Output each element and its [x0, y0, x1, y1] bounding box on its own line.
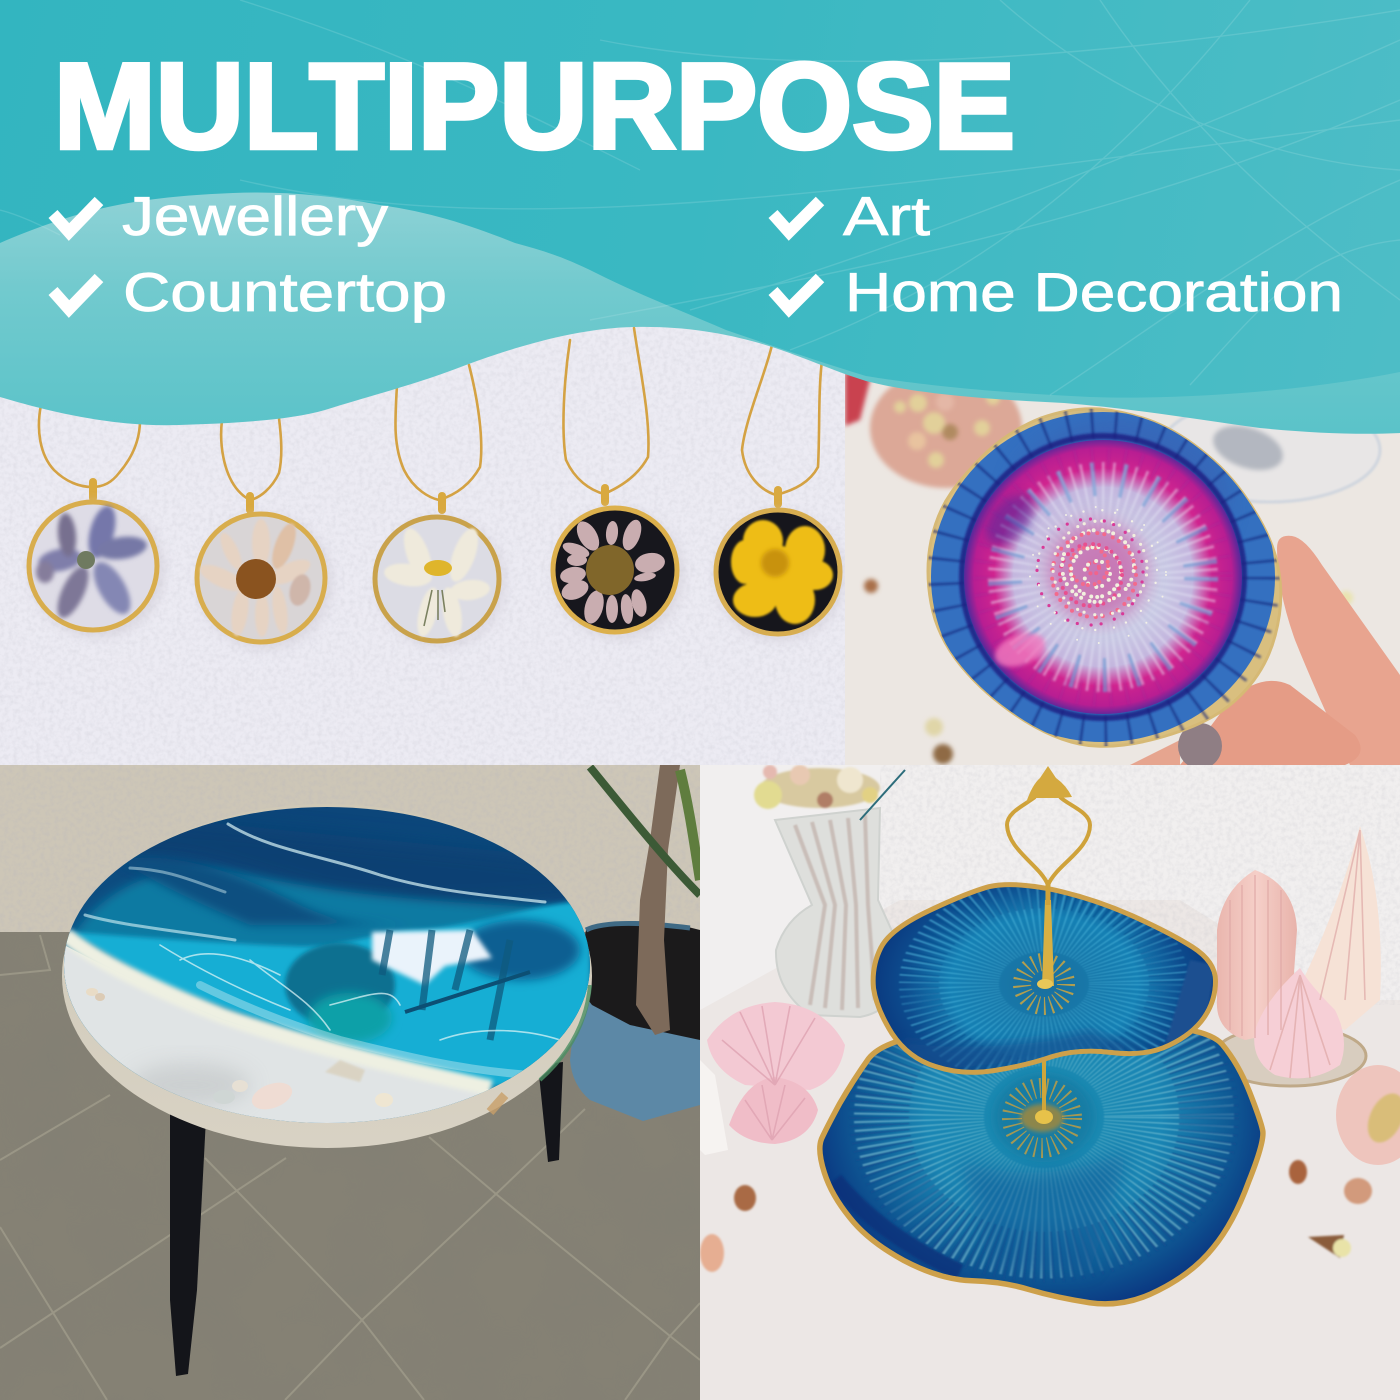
sky reflection	[372, 930, 492, 985]
blurred pink bowl with dried flowers	[845, 368, 1022, 488]
panel: two-tier resin stand photo	[700, 765, 1400, 1400]
table body side	[62, 804, 592, 1148]
resin coaster	[928, 409, 1281, 746]
lower plate gold knob	[1035, 1110, 1053, 1124]
blurred dried petals	[864, 579, 1353, 764]
sand	[64, 946, 488, 1123]
header wave banner	[0, 0, 1400, 434]
item: Countertop: Countertop	[123, 261, 447, 323]
table legs	[170, 1062, 563, 1376]
panel: jewellery photo	[0, 320, 846, 765]
pendant 1: blue flower	[29, 478, 165, 638]
faint net lines	[0, 0, 1400, 395]
item: Art: Art	[843, 185, 930, 247]
pink shell candles	[700, 1002, 845, 1155]
light wave	[0, 0, 1400, 434]
gold handle	[1007, 766, 1090, 989]
wall	[0, 765, 700, 940]
radial streaks	[985, 459, 1221, 695]
lower plate resin	[804, 913, 1284, 1321]
panel: ocean resin table photo	[0, 765, 700, 1400]
table background	[845, 360, 1400, 765]
tiled floor	[0, 932, 700, 1400]
hand fingers	[1130, 536, 1400, 769]
shoreline	[65, 935, 491, 1088]
plant stem and leaves	[590, 765, 700, 1035]
pendant 5: yellow flower	[714, 486, 846, 642]
item: Countertop	[53, 261, 447, 323]
deep water	[60, 805, 600, 1125]
pendant 3: white daisy	[375, 492, 507, 649]
pink bowl and scattered petals	[700, 1065, 1400, 1272]
necklace chains	[39, 328, 822, 500]
plant pot	[570, 922, 700, 1121]
stem between plates	[1042, 1060, 1046, 1112]
dark teal wave	[0, 0, 1400, 398]
pendant 4: dark daisy	[553, 484, 685, 640]
table top	[50, 805, 600, 1140]
pendant 2: brown daisy	[196, 492, 333, 650]
panel: coaster photo	[845, 360, 1400, 769]
bright turquoise shallows	[70, 900, 590, 1090]
feature list	[53, 185, 1343, 323]
shells	[86, 988, 393, 1114]
gold rim	[928, 409, 1281, 746]
right candles and dish	[1214, 826, 1381, 1086]
item: Art	[773, 185, 930, 247]
fabric background	[0, 320, 845, 765]
item: Home Decoration: Home Decoration	[845, 261, 1343, 323]
lower plate	[804, 913, 1284, 1321]
foam lines	[85, 824, 560, 1075]
glitter centre	[1045, 520, 1145, 620]
upper plate resin	[854, 847, 1234, 1121]
table edge accent	[540, 985, 590, 1080]
glass vase with dried flowers	[754, 765, 905, 1017]
blurred silver shell and plate	[1168, 417, 1382, 504]
item: Jewellery	[53, 185, 389, 247]
item: Jewellery: Jewellery	[122, 185, 389, 247]
blue ring and magenta centre	[931, 412, 1275, 742]
wall and table surface	[700, 765, 1400, 1400]
upper plate	[854, 847, 1234, 1121]
title: MULTIPURPOSE	[54, 38, 1015, 174]
